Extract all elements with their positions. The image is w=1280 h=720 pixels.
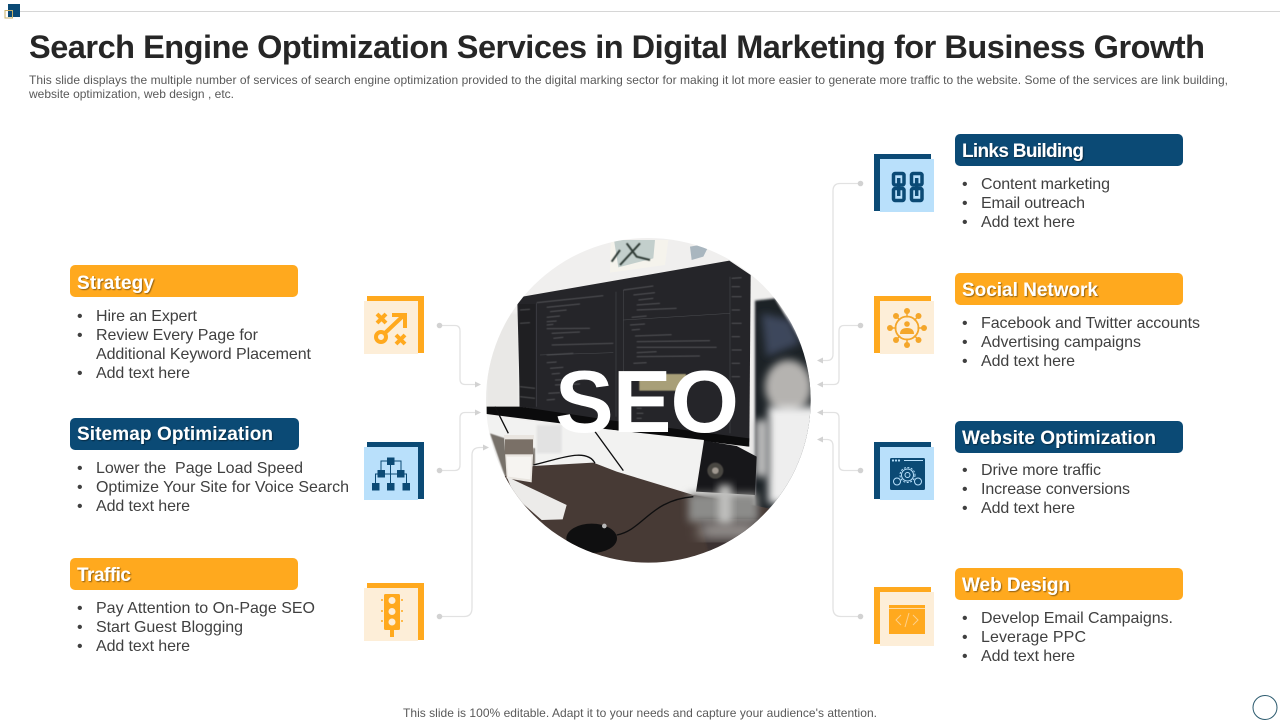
panel: web design: Leverage PPC <box>981 629 1086 646</box>
panel: web design: Web Design <box>962 575 1070 596</box>
panel: web design: Develop Email Campaigns. <box>981 610 1173 627</box>
icon: traffic light <box>364 583 424 641</box>
SEO label: SEO <box>555 352 739 451</box>
icon: links building <box>874 154 934 212</box>
footer note: This slide is 100% editable. Adapt it to your needs and capture your audience's attention. <box>403 706 877 720</box>
panel: strategy: • <box>77 308 83 325</box>
panel: traffic: • <box>77 619 83 636</box>
panel: website optimization: • <box>962 500 968 517</box>
connector: links building <box>817 181 863 364</box>
panel: strategy: Hire an Expert <box>96 308 198 325</box>
desk <box>504 462 770 563</box>
panel: website optimization: • <box>962 462 968 479</box>
title: Search Engine Optimization Services in Digital Marketing for Business Growth <box>29 29 1205 65</box>
main monitor <box>517 261 751 447</box>
panel: traffic: Start Guest Blogging <box>96 619 243 636</box>
panel: strategy: Review Every Page for <box>96 327 259 344</box>
panel: social network: • <box>962 353 968 370</box>
panel: sitemap optimization: • <box>77 460 83 477</box>
panel: traffic <box>70 558 315 655</box>
panel: traffic: • <box>77 638 83 655</box>
description text: website optimization, web design , etc. <box>28 87 234 101</box>
icon: strategy <box>364 296 424 354</box>
panel: social network <box>955 273 1200 370</box>
connector: traffic <box>437 444 489 619</box>
connector: strategy <box>437 323 481 388</box>
panel: sitemap optimization: • <box>77 498 83 515</box>
panel: social network: Add text here <box>981 353 1075 370</box>
description text: This slide displays the multiple number of services of search engine optimization provided to the digital marking sector for making it lot more easier to generate more traffic to the website. Some of the services are link building, <box>29 73 1228 87</box>
panel: sitemap optimization: Lower the Page Load Speed <box>96 460 303 477</box>
panel: traffic: Add text here <box>96 638 190 655</box>
icon: website optimization <box>874 442 934 500</box>
central SEO photo circle <box>480 230 820 570</box>
panel: website optimization: Add text here <box>981 500 1075 517</box>
keyboard <box>507 477 567 520</box>
panel: sitemap optimization: Add text here <box>96 498 190 515</box>
white wall area under monitor <box>610 430 704 442</box>
panel: sitemap optimization: Optimize Your Site for Voice Search <box>96 479 349 496</box>
panel: sitemap optimization: • <box>77 479 83 496</box>
panel: links building: Links Building <box>962 141 1084 162</box>
connector: social network <box>817 323 863 388</box>
panel: website optimization <box>955 421 1183 517</box>
panel: website optimization: Increase conversions <box>981 481 1130 498</box>
panel: sitemap optimization <box>70 418 349 515</box>
panel: social network: Facebook and Twitter accounts <box>981 315 1200 332</box>
top rule and corner mark <box>5 4 1280 18</box>
panel: web design: • <box>962 648 968 665</box>
blurred objects on the desk <box>688 493 758 522</box>
panel: web design <box>955 568 1183 665</box>
panel: links building <box>955 134 1183 231</box>
connector: website optimization <box>817 410 863 473</box>
panel: social network: Advertising campaigns <box>981 334 1141 351</box>
connector: web design <box>817 436 863 619</box>
panel: strategy: Additional Keyword Placement <box>96 346 312 363</box>
panel: traffic: Pay Attention to On-Page SEO <box>96 600 315 617</box>
coffee glass <box>504 435 534 482</box>
panel: social network: Social Network <box>962 280 1098 301</box>
icon: social network <box>874 296 934 354</box>
panel: links building: Add text here <box>981 214 1075 231</box>
panel: strategy: • <box>77 365 83 382</box>
monitor stand and speaker <box>696 441 757 495</box>
panel: strategy: Add text here <box>96 365 190 382</box>
icon: sitemap <box>364 442 424 500</box>
panel: strategy <box>70 265 312 382</box>
panel: web design: Add text here <box>981 648 1075 665</box>
panel: website optimization: • <box>962 481 968 498</box>
panel: social network: • <box>962 315 968 332</box>
panel: web design: • <box>962 610 968 627</box>
corner circle <box>1253 696 1277 720</box>
panel: website optimization: Drive more traffic <box>981 462 1101 479</box>
panel: traffic: Traffic <box>77 565 131 586</box>
description text <box>28 73 1228 101</box>
panel: web design: • <box>962 629 968 646</box>
connector: sitemap <box>437 410 481 473</box>
panel: strategy: Strategy <box>77 273 154 294</box>
panel: links building: • <box>962 214 968 231</box>
cables <box>495 407 693 535</box>
panel: website optimization: Website Optimization <box>962 428 1156 449</box>
panel: strategy: • <box>77 327 83 344</box>
code lines on screen <box>520 278 742 418</box>
mouse <box>566 524 617 553</box>
panel: social network: • <box>962 334 968 351</box>
icon: web design <box>874 587 934 646</box>
wall pictures <box>610 240 707 268</box>
panel: links building: Email outreach <box>981 195 1085 212</box>
panel: links building: • <box>962 176 968 193</box>
panel: traffic: • <box>77 600 83 617</box>
panel: links building: Content marketing <box>981 176 1110 193</box>
second monitor blurred <box>755 298 818 513</box>
panel: links building: • <box>962 195 968 212</box>
panel: sitemap optimization: Sitemap Optimization <box>77 424 273 445</box>
